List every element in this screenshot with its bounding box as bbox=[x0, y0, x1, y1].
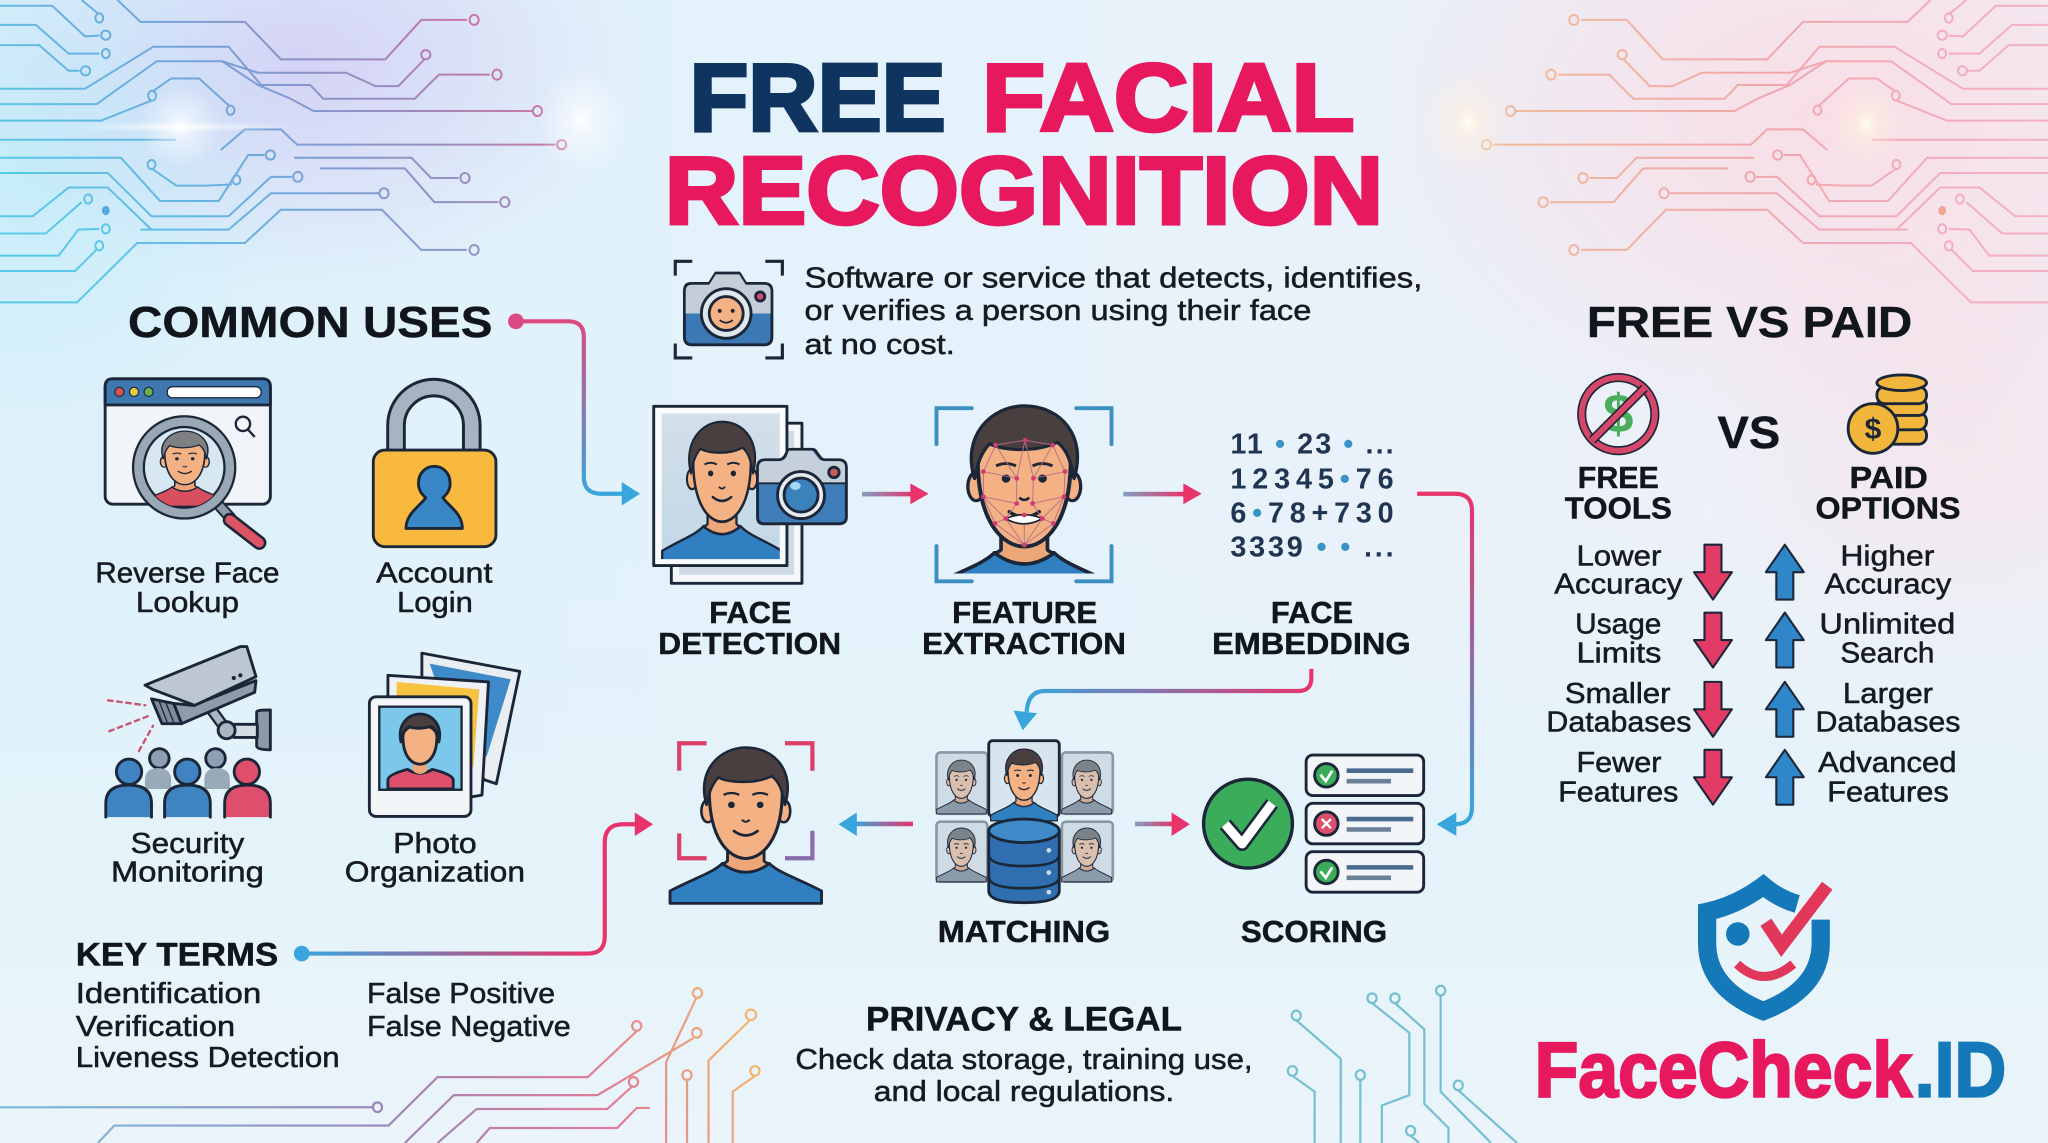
free tools list: Accuracy bbox=[1554, 569, 1683, 601]
description: Software or service that detects, identifies, bbox=[805, 262, 1422, 294]
label: free tools: TOOLS bbox=[1565, 491, 1672, 526]
icon: coins: $ bbox=[1865, 413, 1882, 446]
label: reverse face lookup bbox=[95, 558, 280, 619]
description: at no cost. bbox=[805, 329, 955, 361]
vs label: VS bbox=[1718, 407, 1780, 458]
icon: embedding numbers: 6•78+730 bbox=[1230, 498, 1395, 530]
paid options list: Search bbox=[1840, 637, 1934, 669]
paid options list: Larger bbox=[1843, 678, 1934, 710]
icon: embedding numbers bbox=[1230, 428, 1395, 563]
icon: embedding numbers: 12345•76 bbox=[1230, 464, 1395, 496]
label: reverse face lookup: Lookup bbox=[136, 587, 239, 619]
key terms bbox=[76, 935, 571, 1074]
title bbox=[665, 46, 1383, 244]
icon: feature extraction face mesh bbox=[934, 404, 1114, 584]
logo: shield bbox=[1707, 886, 1827, 1011]
circuit pattern bottom right bbox=[1288, 986, 1517, 1143]
heading: free vs paid: FREE VS PAID bbox=[1587, 299, 1912, 347]
label: feature extraction: EXTRACTION bbox=[922, 626, 1126, 661]
icon: embedding numbers: 11 • 23 • ... bbox=[1230, 428, 1395, 460]
paid options list: Accuracy bbox=[1825, 569, 1952, 601]
label: security monitoring bbox=[111, 828, 264, 889]
icon: reverse face lookup bbox=[105, 379, 270, 543]
label: face detection bbox=[658, 595, 841, 661]
label: account login bbox=[376, 558, 492, 619]
key terms: False Positive bbox=[367, 978, 555, 1010]
paid options list: Unlimited bbox=[1819, 609, 1955, 641]
glow highlights bbox=[63, 65, 1903, 176]
arrow: matching to scoring bbox=[1135, 813, 1190, 836]
label: free tools bbox=[1565, 460, 1672, 526]
free tools list: Lower bbox=[1576, 541, 1662, 573]
key terms: Liveness Detection bbox=[76, 1042, 340, 1074]
icon: identified face bbox=[670, 743, 822, 903]
label: photo organization bbox=[345, 828, 525, 889]
privacy and legal: Check data storage, training use, bbox=[795, 1044, 1253, 1076]
arrow: detection to extraction bbox=[862, 483, 929, 504]
free tools list: Smaller bbox=[1565, 678, 1671, 710]
icon: no dollar bbox=[1582, 378, 1655, 451]
privacy and legal: and local regulations. bbox=[874, 1076, 1174, 1108]
label: reverse face lookup: Reverse Face bbox=[95, 558, 280, 590]
label: security monitoring: Security bbox=[131, 828, 245, 860]
title: FREE bbox=[690, 46, 946, 152]
paid options list bbox=[1816, 541, 1960, 808]
paid options list: Higher bbox=[1840, 541, 1935, 573]
label: face embedding bbox=[1212, 595, 1411, 661]
description bbox=[805, 262, 1422, 361]
label: paid options bbox=[1816, 460, 1960, 526]
key terms: Identification bbox=[76, 978, 261, 1010]
circuit pattern bottom left bbox=[0, 988, 760, 1143]
arrow: matching to identified face bbox=[839, 813, 913, 836]
key terms: False Negative bbox=[367, 1011, 571, 1043]
description: or verifies a person using their face bbox=[805, 295, 1311, 327]
up arrows bbox=[1766, 545, 1804, 805]
heading: common uses: COMMON USES bbox=[128, 299, 492, 347]
down arrows bbox=[1694, 545, 1732, 805]
free tools list bbox=[1546, 541, 1691, 808]
logo: wordmark: .ID bbox=[1915, 1026, 2006, 1114]
label: photo organization: Organization bbox=[345, 857, 525, 889]
title: FACIAL bbox=[982, 46, 1354, 152]
paid options list: Features bbox=[1827, 776, 1949, 808]
free tools list: Features bbox=[1558, 776, 1678, 808]
icon: security camera and people bbox=[106, 647, 270, 817]
label: matching: MATCHING bbox=[938, 914, 1110, 949]
connector: key terms to identified face bbox=[294, 813, 653, 961]
circuit pattern top left bbox=[0, 0, 566, 302]
logo: wordmark: FaceCheck bbox=[1535, 1026, 1913, 1114]
paid options list: Advanced bbox=[1818, 747, 1957, 779]
icon: photo organization stack bbox=[369, 653, 520, 816]
icon: matching faces and database bbox=[936, 741, 1113, 903]
title: RECOGNITION bbox=[665, 138, 1383, 244]
icon: camera with face bbox=[675, 261, 782, 358]
connector: embedding to scoring bbox=[1417, 494, 1472, 836]
icon: face detection photo and camera bbox=[654, 406, 846, 583]
label: face detection: FACE bbox=[709, 595, 792, 630]
key terms: KEY TERMS bbox=[76, 935, 278, 972]
label: scoring: SCORING bbox=[1241, 914, 1387, 949]
connector: common uses to face detection bbox=[508, 314, 640, 506]
label: photo organization: Photo bbox=[393, 828, 477, 860]
label: paid options: PAID bbox=[1849, 460, 1928, 495]
icon: no dollar: $ bbox=[1603, 382, 1634, 444]
free tools list: Usage bbox=[1575, 609, 1661, 641]
label: face detection: DETECTION bbox=[658, 626, 841, 661]
label: security monitoring: Monitoring bbox=[111, 857, 264, 889]
label: account login: Login bbox=[397, 587, 473, 619]
paid options list: Databases bbox=[1816, 707, 1960, 739]
privacy and legal: PRIVACY & LEGAL bbox=[866, 1001, 1182, 1039]
free tools list: Limits bbox=[1576, 637, 1661, 669]
icon: coins bbox=[1848, 375, 1927, 453]
label: face embedding: FACE bbox=[1271, 595, 1353, 630]
label: free tools: FREE bbox=[1578, 460, 1659, 495]
icon: account login lock bbox=[373, 388, 496, 547]
label: feature extraction: FEATURE bbox=[952, 595, 1097, 630]
key terms: Verification bbox=[76, 1011, 235, 1043]
free tools list: Databases bbox=[1546, 707, 1691, 739]
label: feature extraction bbox=[922, 595, 1126, 661]
icon: scoring checklist bbox=[1204, 755, 1424, 892]
free tools list: Fewer bbox=[1576, 747, 1662, 779]
connector: embedding to matching bbox=[1014, 669, 1311, 730]
icon: embedding numbers: 3339 • • ... bbox=[1230, 531, 1395, 563]
label: paid options: OPTIONS bbox=[1816, 491, 1960, 526]
arrow: extraction to embedding bbox=[1123, 483, 1202, 504]
label: account login: Account bbox=[376, 558, 492, 590]
privacy and legal bbox=[795, 1001, 1253, 1108]
label: face embedding: EMBEDDING bbox=[1212, 626, 1411, 661]
circuit pattern top right bbox=[1482, 0, 2048, 302]
